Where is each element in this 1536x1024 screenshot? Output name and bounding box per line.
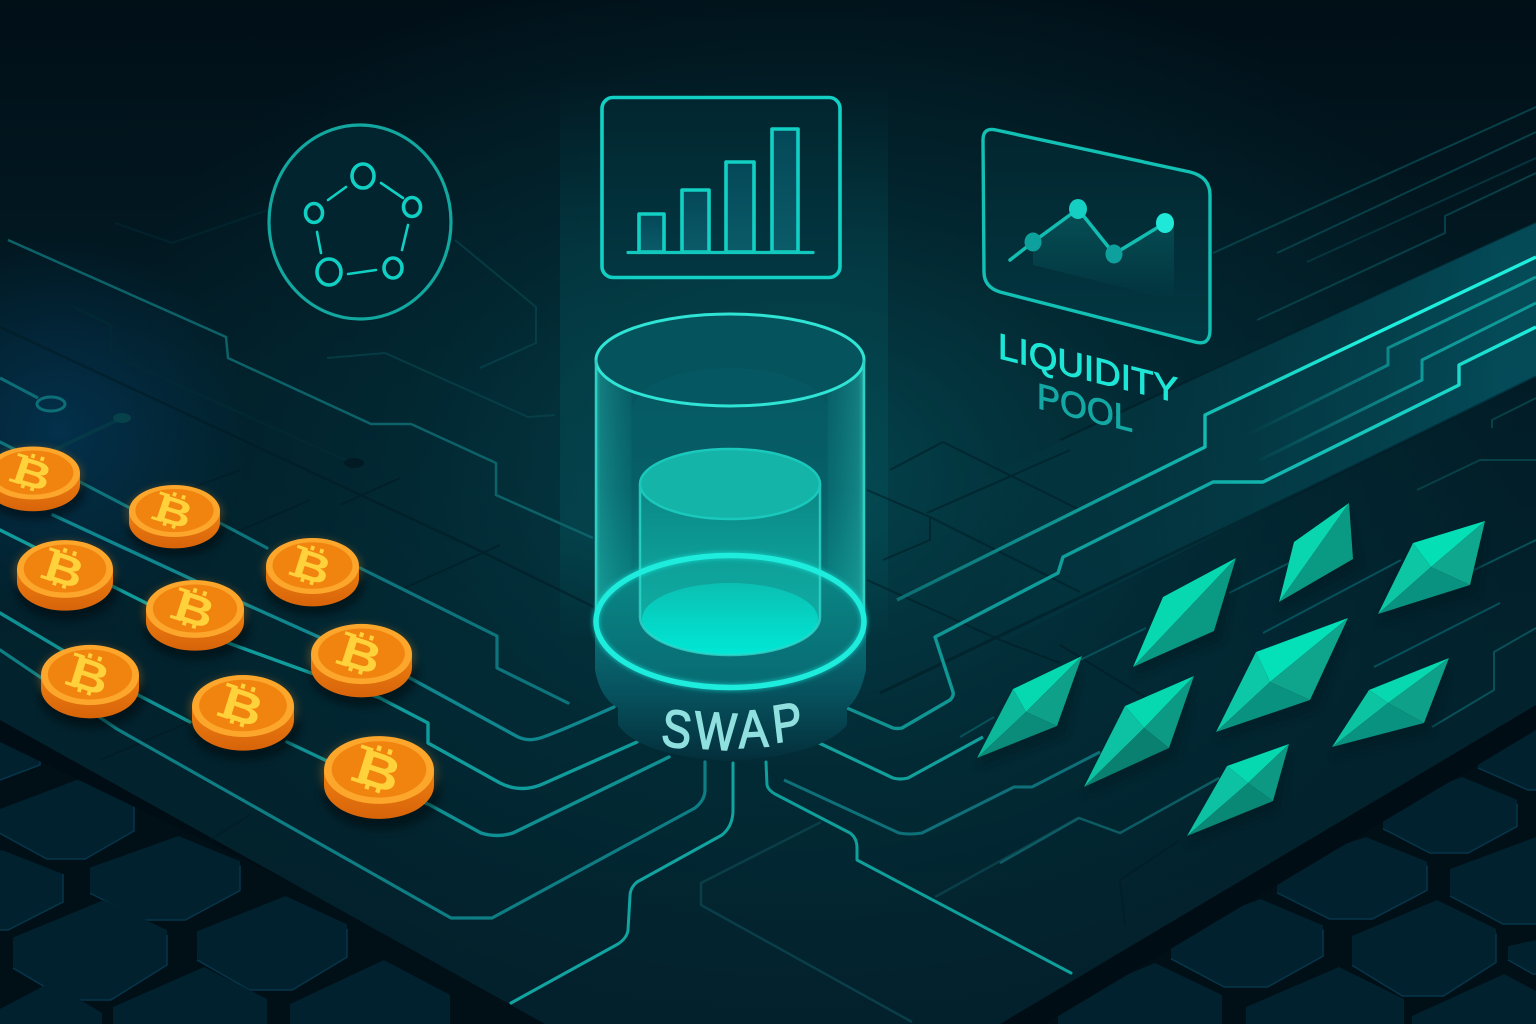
bar chart panel bbox=[602, 98, 840, 278]
circle outline bbox=[269, 125, 451, 319]
bright upper trace bbox=[897, 257, 1536, 600]
coin 1: B bbox=[8, 447, 57, 500]
coin 4: B bbox=[288, 539, 337, 594]
trace node: dark dot bbox=[344, 458, 364, 468]
crystal 4 bbox=[1216, 618, 1348, 732]
bright diagonal band bbox=[880, 222, 1536, 693]
base pedestal bbox=[595, 625, 866, 761]
token crystals bbox=[977, 503, 1485, 846]
faint upper-right traces bbox=[960, 107, 1536, 737]
bitcoin coins bbox=[0, 446, 441, 830]
ring platform bbox=[596, 556, 864, 688]
crystal 6 bbox=[977, 656, 1082, 758]
coin 8 bbox=[189, 675, 300, 761]
coin 2: B bbox=[150, 487, 198, 538]
crystal 3 bbox=[1133, 558, 1236, 667]
platform edge shadow bbox=[0, 705, 1536, 1024]
coin 5 bbox=[143, 580, 250, 660]
ring glow bbox=[596, 556, 864, 688]
blue glow at left bbox=[0, 230, 260, 620]
network nodes bbox=[306, 164, 420, 285]
inner cylinder outline bbox=[640, 484, 820, 655]
line chart stroke bbox=[1010, 209, 1165, 260]
trace node: faint pad bbox=[113, 413, 131, 423]
main trace to far right bbox=[847, 327, 1536, 728]
ring stroke bbox=[596, 556, 864, 688]
coin 5: B bbox=[169, 582, 220, 639]
coin 6: B bbox=[335, 625, 388, 685]
coin 8: B bbox=[216, 676, 269, 737]
coin 7: B bbox=[64, 647, 115, 706]
label: swap: SWAP bbox=[659, 692, 805, 763]
coin 4 bbox=[263, 538, 365, 615]
side edges bbox=[596, 360, 864, 622]
crystal 8 bbox=[1187, 744, 1289, 836]
bars bbox=[639, 129, 798, 252]
faint upper-left circuit traces bbox=[54, 210, 555, 463]
swap cylinder bbox=[595, 314, 866, 761]
inner cylinder top bbox=[640, 449, 820, 519]
back inner shade bbox=[632, 368, 828, 440]
right band secondary traces bbox=[1247, 277, 1536, 460]
top rim bbox=[596, 314, 864, 406]
liquidity pool panel bbox=[983, 129, 1210, 343]
trace with ring terminal bbox=[0, 378, 65, 411]
network connections bbox=[317, 183, 408, 274]
glass body bbox=[596, 360, 864, 622]
crystal 5 bbox=[1332, 658, 1449, 747]
dark grid seams bbox=[0, 222, 1536, 925]
glass top opening bbox=[596, 314, 864, 406]
line chart points bbox=[1024, 199, 1174, 264]
panel frame bbox=[602, 98, 840, 278]
line chart area bbox=[1033, 209, 1174, 300]
crystal 2 bbox=[1378, 521, 1485, 614]
crystal 1 bbox=[1279, 503, 1353, 602]
inner cylinder side bbox=[640, 484, 820, 655]
coin 7 bbox=[38, 645, 145, 728]
label: liquidity: LIQUIDITY bbox=[998, 326, 1178, 411]
coin 9 bbox=[321, 736, 441, 830]
central light column bbox=[560, 80, 888, 660]
faint lower traces bbox=[701, 778, 1219, 1022]
panel frame bbox=[983, 129, 1210, 343]
upper-left main trace bbox=[8, 240, 593, 538]
coin 3 bbox=[14, 540, 119, 620]
crystal 7 bbox=[1084, 676, 1194, 787]
inner glass walls bbox=[596, 360, 864, 622]
coin 6 bbox=[308, 624, 418, 707]
coin 2 bbox=[126, 485, 225, 557]
right lower traces bbox=[784, 737, 1100, 834]
coin 1 bbox=[0, 446, 86, 520]
inner liquid bottom bbox=[642, 583, 818, 655]
label: pool: POOL bbox=[1037, 376, 1133, 440]
circuit traces from coins to swap bbox=[0, 442, 1071, 1003]
coin 3: B bbox=[40, 542, 90, 599]
crystal shadows bbox=[977, 513, 1485, 846]
coin 9: B bbox=[350, 737, 407, 804]
hexagon floor tiles bbox=[0, 728, 1536, 1024]
axis bbox=[628, 251, 813, 254]
icon: network circle bbox=[269, 125, 451, 319]
